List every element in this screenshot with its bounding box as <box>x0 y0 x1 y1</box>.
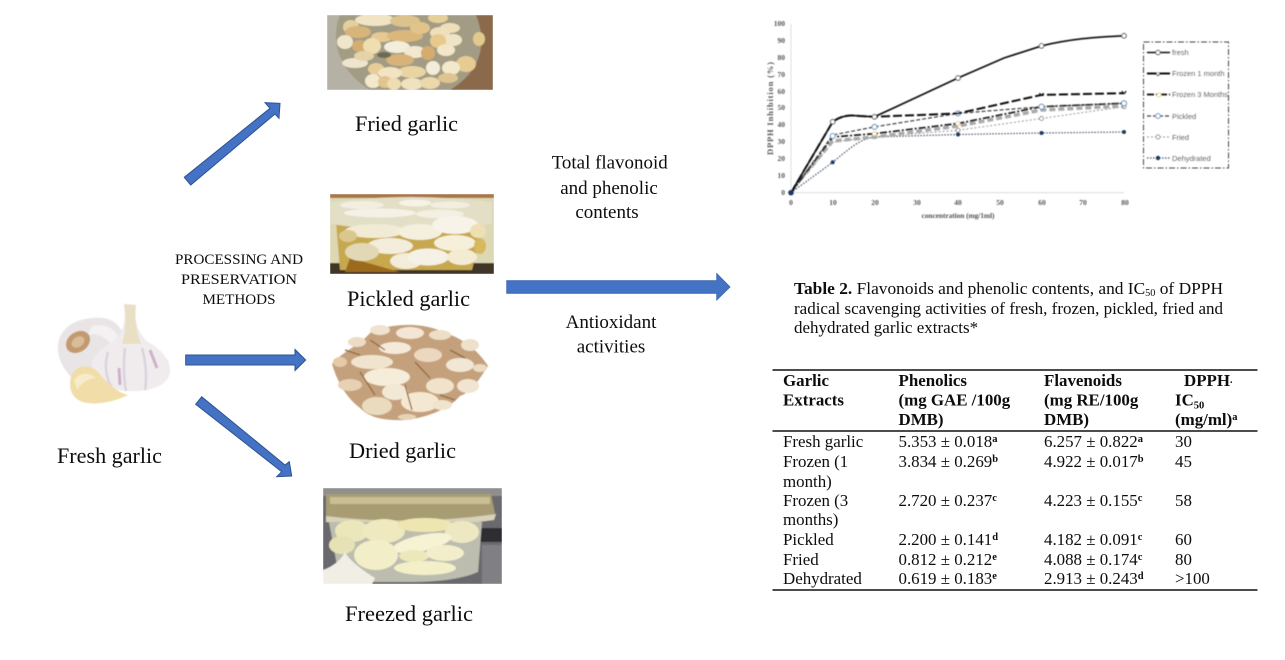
label: dried garlic: Dried garlic <box>349 438 456 463</box>
table header: Extracts <box>783 391 844 410</box>
table header: a <box>1232 412 1238 423</box>
table: phenolics, flavonoids and IC50 <box>772 370 1258 590</box>
row: pickled: d <box>992 532 998 543</box>
row: frozen 3 months: 4.223 ± 0.155 <box>1044 491 1138 510</box>
y axis labels: 50 <box>778 103 785 112</box>
row: dehydrated: 2.913 ± 0.243 <box>1044 569 1138 588</box>
x axis labels: 30 <box>913 198 921 207</box>
table header: DMB) <box>1044 410 1089 429</box>
x axis labels: 20 <box>871 198 879 207</box>
y axis labels: 0 <box>781 188 785 197</box>
row: dehydrated: Dehydrated <box>783 569 862 588</box>
photo: freezed garlic <box>323 488 502 584</box>
row: fresh garlic: 6.257 ± 0.822 <box>1044 432 1138 451</box>
table caption: radical scavenging activities of fresh, frozen, pickled, fried and <box>794 299 1223 318</box>
label: total flavonoid and phenolic contents: Total flavonoid <box>552 152 668 173</box>
row: pickled: Pickled <box>783 530 834 549</box>
row: pickled: 4.182 ± 0.091 <box>1044 530 1138 549</box>
heading: processing and preservation methods: PROCESSING AND <box>175 252 303 268</box>
table header: Garlic <box>783 371 829 390</box>
row: pickled: 2.200 ± 0.141 <box>898 530 992 549</box>
row: frozen 1 month <box>783 452 1192 491</box>
x axis labels: 50 <box>996 198 1004 207</box>
row: frozen 3 months <box>783 491 1192 529</box>
legend: fresh <box>1172 48 1189 57</box>
heading: processing and preservation methods: METHODS <box>202 292 276 308</box>
row: frozen 1 month: Frozen (1 <box>783 452 848 471</box>
label: antioxidant activities <box>566 312 657 358</box>
row: fresh garlic: a <box>992 434 998 445</box>
label: total flavonoid and phenolic contents: contents <box>575 202 639 223</box>
label: pickled garlic: Pickled garlic <box>347 286 470 311</box>
row: dehydrated <box>783 569 1210 588</box>
row: frozen 1 month: b <box>992 454 998 465</box>
x axis labels: 80 <box>1121 198 1129 207</box>
y axis labels: 80 <box>778 53 785 62</box>
y axis labels: 70 <box>778 70 785 79</box>
row: frozen 1 month: b <box>1138 454 1144 465</box>
y axis labels: 100 <box>774 19 785 28</box>
row: frozen 3 months: months) <box>783 510 838 529</box>
row: pickled <box>783 530 1192 549</box>
arrow: to freezed garlic <box>196 397 292 477</box>
x axis labels: 70 <box>1079 198 1087 207</box>
row: fried: 0.812 ± 0.212 <box>898 550 992 569</box>
label: antioxidant activities: Antioxidant <box>566 312 657 333</box>
legend: Pickled <box>1172 112 1196 121</box>
y axis labels: 30 <box>778 137 785 146</box>
series: frozen 3 months <box>791 103 1124 193</box>
x axis labels <box>789 198 1129 207</box>
row: frozen 3 months: c <box>992 493 997 504</box>
heading: processing and preservation methods: PRESERVATION <box>181 272 297 288</box>
row: frozen 3 months: 2.720 ± 0.237 <box>898 491 992 510</box>
y axis labels: 40 <box>778 120 785 129</box>
row: fresh garlic: Fresh garlic <box>783 432 863 451</box>
x axis labels: 60 <box>1038 198 1046 207</box>
icon: fresh garlic bulb and clove <box>58 304 170 403</box>
photo: fried garlic <box>327 13 493 90</box>
y axis labels: 20 <box>778 154 785 163</box>
legend: Frozen 1 month <box>1172 69 1225 78</box>
row: fried: 4.088 ± 0.174 <box>1044 550 1138 569</box>
table header <box>783 371 1238 429</box>
y axis labels <box>774 19 785 197</box>
y axis labels: 60 <box>778 87 785 96</box>
label: fried garlic: Fried garlic <box>355 111 458 136</box>
chart: DPPH inhibition line chart <box>765 19 1228 220</box>
row: frozen 1 month: month) <box>783 472 832 491</box>
y axis labels: 90 <box>778 36 785 45</box>
series: pickled <box>791 101 1126 193</box>
row: pickled: 60 <box>1175 530 1192 549</box>
row: fried: c <box>1138 552 1143 563</box>
label: total flavonoid and phenolic contents: and phenolic <box>560 178 658 199</box>
table header: DMB) <box>898 410 944 429</box>
row: frozen 1 month: 3.834 ± 0.269 <box>898 452 992 471</box>
legend: Fried <box>1172 133 1189 142</box>
arrow: to results <box>507 274 730 300</box>
table header: . <box>1230 375 1233 386</box>
row: fresh garlic: 30 <box>1175 432 1192 451</box>
series: gray shadow <box>800 106 1124 180</box>
label: total flavonoid and phenolic contents <box>552 152 668 223</box>
heading: processing and preservation methods <box>175 252 303 308</box>
x axis title: concentration (mg/1ml) <box>922 211 995 220</box>
table header: 50 <box>1194 401 1204 412</box>
row: fried <box>783 550 1192 569</box>
table caption: Table 2. Flavonoids and phenolic contents, and IC <box>794 279 1139 298</box>
table header: IC <box>1175 391 1194 410</box>
table caption: 50 <box>1145 288 1155 299</box>
row: pickled: c <box>1138 532 1143 543</box>
x axis labels: 0 <box>789 198 793 207</box>
y axis title: DPPH Inhibition (%) <box>765 62 775 155</box>
table header: DPPH <box>1184 371 1230 390</box>
row: dehydrated: 0.619 ± 0.183 <box>898 569 992 588</box>
table header: (mg/ml) <box>1175 410 1232 429</box>
arrow: to fried garlic <box>184 103 280 185</box>
x axis labels: 40 <box>954 198 962 207</box>
row: fried: 80 <box>1175 550 1192 569</box>
table caption: dehydrated garlic extracts* <box>794 318 978 337</box>
row: frozen 1 month: 4.922 ± 0.017 <box>1044 452 1138 471</box>
table header: (mg RE/100g <box>1044 391 1139 410</box>
row: fried: Fried <box>783 550 819 569</box>
legend: Dehydrated <box>1172 154 1211 163</box>
row: frozen 3 months: 58 <box>1175 491 1192 510</box>
photo: pickled garlic <box>330 194 494 274</box>
row: frozen 1 month: 45 <box>1175 452 1192 471</box>
table header: Flavenoids <box>1044 371 1122 390</box>
row: fried: e <box>992 552 997 563</box>
row: fresh garlic: 5.353 ± 0.018 <box>898 432 992 451</box>
series: dehydrated <box>791 130 1126 193</box>
table caption: of DPPH <box>1155 279 1223 298</box>
legend: Frozen 3 Months <box>1172 90 1228 99</box>
series: fried <box>791 105 1126 193</box>
row: dehydrated: d <box>1138 571 1144 582</box>
table header: (mg GAE /100g <box>898 391 1011 410</box>
row: frozen 3 months: Frozen (3 <box>783 491 848 510</box>
legend <box>1144 42 1228 168</box>
label: freezed garlic: Freezed garlic <box>345 601 473 626</box>
row: fresh garlic <box>783 432 1192 451</box>
label: fresh garlic: Fresh garlic <box>57 443 162 468</box>
table caption <box>794 279 1223 337</box>
series: fresh <box>791 34 1126 193</box>
arrow: to dried garlic <box>186 350 306 370</box>
row: dehydrated: e <box>992 571 997 582</box>
row: fresh garlic: a <box>1138 434 1144 445</box>
series: frozen 1 month <box>791 91 1126 193</box>
photo: dried garlic <box>332 325 488 420</box>
table header: Phenolics <box>898 371 967 390</box>
y axis labels: 10 <box>778 171 785 180</box>
x axis labels: 10 <box>829 198 837 207</box>
row: frozen 3 months: c <box>1138 493 1143 504</box>
row: dehydrated: >100 <box>1175 569 1210 588</box>
label: antioxidant activities: activities <box>577 337 645 358</box>
